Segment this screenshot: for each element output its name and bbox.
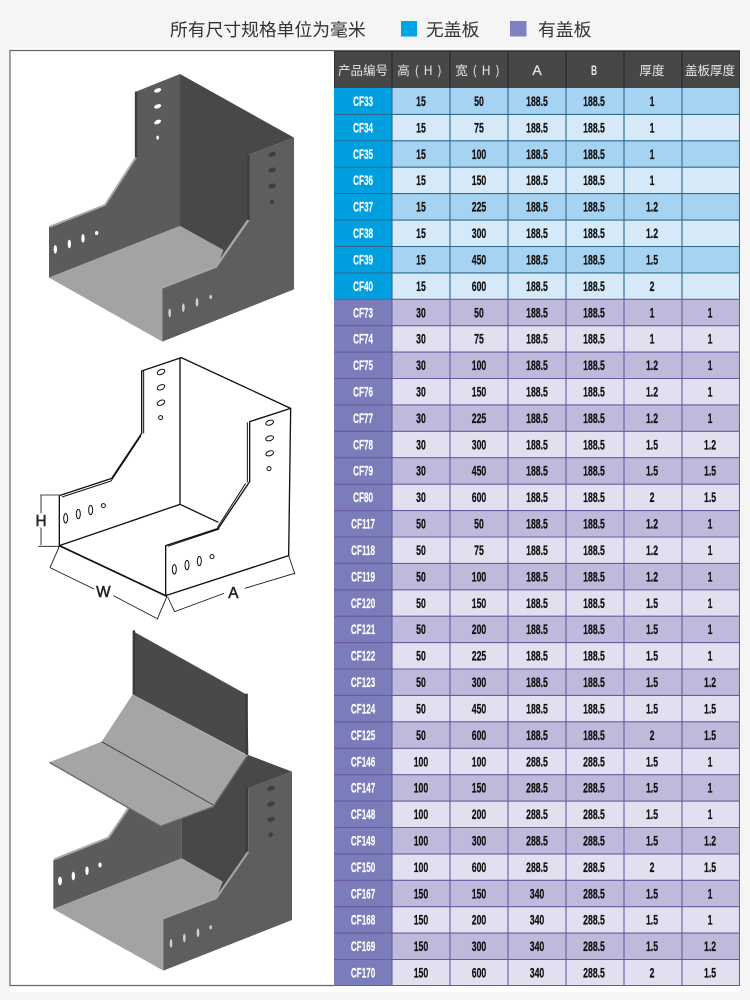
row CF38: 188.5 xyxy=(526,226,548,242)
row CF121: 188.5 xyxy=(583,622,605,638)
row CF75: CF75 xyxy=(353,359,373,374)
row CF117: CF117 xyxy=(351,518,375,532)
row CF117: 50 xyxy=(416,517,426,532)
row CF33: 1 xyxy=(650,94,655,110)
row CF124: 188.5 xyxy=(526,701,548,717)
row CF122: 50 xyxy=(416,649,426,664)
row CF125: 600 xyxy=(472,728,486,743)
row CF74: 1 xyxy=(708,332,713,347)
row CF168: CF168 xyxy=(351,914,376,928)
row CF39: 1.5 xyxy=(646,252,658,268)
row CF123: CF123 xyxy=(351,676,375,691)
row CF33 xyxy=(353,94,655,110)
row CF147: 1.5 xyxy=(646,781,658,796)
row CF73: 1 xyxy=(650,305,655,321)
row CF150: 600 xyxy=(472,860,486,876)
row CF119: 188.5 xyxy=(583,569,605,585)
row CF73: CF73 xyxy=(353,306,373,321)
row CF148: 288.5 xyxy=(583,807,605,823)
row CF40: 2 xyxy=(650,279,654,295)
row CF169: 1.5 xyxy=(646,939,658,955)
row CF74: 188.5 xyxy=(526,332,548,347)
row CF149: 288.5 xyxy=(583,833,605,849)
row CF122: CF122 xyxy=(351,650,375,664)
row CF34: 75 xyxy=(474,120,484,136)
row CF38: 300 xyxy=(472,226,486,242)
row CF34 xyxy=(353,120,655,136)
row CF78: 188.5 xyxy=(526,437,548,453)
row CF124: 50 xyxy=(416,701,426,717)
row CF40: 600 xyxy=(472,279,486,295)
row CF146: 1 xyxy=(708,754,713,770)
drawing: open cable tray reducer xyxy=(49,74,294,342)
row CF73: 50 xyxy=(474,305,484,321)
row CF37: CF37 xyxy=(353,201,373,215)
row CF121: 1 xyxy=(708,622,713,638)
row CF169: 150 xyxy=(414,939,428,955)
row CF38 xyxy=(353,226,658,242)
row CF120: 50 xyxy=(416,596,426,611)
row CF149 xyxy=(351,833,716,849)
row CF167: 150 xyxy=(472,886,486,902)
row CF80 xyxy=(353,490,716,506)
row CF146: 288.5 xyxy=(583,754,605,770)
row CF168: 340 xyxy=(530,913,544,928)
row CF37: 225 xyxy=(472,200,487,215)
row CF79 xyxy=(353,464,716,479)
row CF75: 30 xyxy=(416,358,426,374)
row CF169: 1.2 xyxy=(704,939,716,955)
row CF122 xyxy=(351,649,713,664)
row CF79: 1.5 xyxy=(704,464,716,479)
row CF123: 188.5 xyxy=(526,675,548,691)
row CF78: 188.5 xyxy=(583,437,605,453)
table header: 厚度 xyxy=(639,60,665,79)
legend: with cover xyxy=(510,16,592,42)
row CF150: 288.5 xyxy=(526,860,548,876)
table header: B xyxy=(591,64,597,79)
row CF117: 188.5 xyxy=(583,517,605,532)
row CF35: 188.5 xyxy=(526,147,548,162)
rows: no cover xyxy=(334,88,740,299)
row CF120: 188.5 xyxy=(526,596,548,611)
row CF118 xyxy=(351,543,713,559)
row CF73: 1 xyxy=(708,305,713,321)
row CF37: 188.5 xyxy=(526,200,548,215)
row CF121: 50 xyxy=(416,622,426,638)
row CF147: 100 xyxy=(414,781,428,796)
row CF123: 300 xyxy=(472,675,486,691)
row CF73: 30 xyxy=(416,305,426,321)
table header: 宽 ( H ) xyxy=(455,60,501,79)
row CF36: 15 xyxy=(416,173,426,189)
row CF125 xyxy=(351,728,716,743)
row CF120: 1.5 xyxy=(646,596,658,611)
row CF117: 1 xyxy=(708,517,713,532)
row CF121: 200 xyxy=(472,622,486,638)
row CF150: 100 xyxy=(414,860,428,876)
row CF80: 2 xyxy=(650,490,654,506)
row CF35: 100 xyxy=(472,147,486,162)
row CF118: 1.2 xyxy=(646,543,658,559)
row CF37 xyxy=(353,200,658,215)
row CF167: CF167 xyxy=(351,887,375,902)
row CF148: 100 xyxy=(414,807,428,823)
row CF33: 188.5 xyxy=(526,94,548,110)
row CF168: 1 xyxy=(708,913,713,928)
row CF38: 188.5 xyxy=(583,226,605,242)
row CF74: 1 xyxy=(650,332,655,347)
row CF35: 1 xyxy=(650,147,655,162)
row CF169: 288.5 xyxy=(583,939,605,955)
row CF33: 15 xyxy=(416,94,426,110)
row CF35: CF35 xyxy=(353,148,373,162)
row CF117: 50 xyxy=(474,517,484,532)
row CF79: CF79 xyxy=(353,465,373,479)
row CF33: 50 xyxy=(474,94,484,110)
row CF34: CF34 xyxy=(353,121,373,136)
row CF79: 188.5 xyxy=(583,464,605,479)
row CF37: 188.5 xyxy=(583,200,605,215)
row CF124: 1.5 xyxy=(646,701,658,717)
row CF169: CF169 xyxy=(351,940,375,955)
row CF77 xyxy=(353,411,713,427)
row CF78: CF78 xyxy=(353,438,373,453)
row CF38: CF38 xyxy=(353,227,373,242)
row CF170: 150 xyxy=(414,965,428,981)
row CF148 xyxy=(351,807,713,823)
row CF118: 50 xyxy=(416,543,426,559)
row CF125: 50 xyxy=(416,728,426,743)
row CF77: 30 xyxy=(416,411,426,427)
row CF80: 1.5 xyxy=(704,490,716,506)
row CF119: 1.2 xyxy=(646,569,658,585)
row CF79: 188.5 xyxy=(526,464,548,479)
row CF119: 188.5 xyxy=(526,569,548,585)
row CF124: 450 xyxy=(472,701,486,717)
row CF37: 1.2 xyxy=(646,200,658,215)
row CF79: 30 xyxy=(416,464,426,479)
row CF76: 188.5 xyxy=(526,384,548,400)
row CF170: 2 xyxy=(650,965,654,981)
row CF147: 288.5 xyxy=(583,781,605,796)
row CF117: 188.5 xyxy=(526,517,548,532)
row CF78 xyxy=(353,437,716,453)
row CF73: 188.5 xyxy=(583,305,605,321)
row CF119: CF119 xyxy=(351,570,375,585)
legend: no cover: 无盖板 xyxy=(426,16,480,42)
row CF73 xyxy=(353,305,713,321)
row CF146: 288.5 xyxy=(526,754,548,770)
row CF167: 288.5 xyxy=(583,886,605,902)
row CF150 xyxy=(351,860,716,876)
row CF39: 188.5 xyxy=(526,252,548,268)
row CF170: 340 xyxy=(530,965,544,981)
specification table xyxy=(334,51,740,986)
row CF124: 188.5 xyxy=(583,701,605,717)
row CF124 xyxy=(351,701,716,717)
row CF117 xyxy=(351,517,713,532)
row CF80: 188.5 xyxy=(583,490,605,506)
row CF120: 188.5 xyxy=(583,596,605,611)
row CF34: 15 xyxy=(416,120,426,136)
row CF146: CF146 xyxy=(351,755,375,770)
row CF123 xyxy=(351,675,716,691)
row CF74: 30 xyxy=(416,332,426,347)
row CF148: 1 xyxy=(708,807,713,823)
row CF39: CF39 xyxy=(353,253,373,268)
row CF121 xyxy=(351,622,713,638)
row CF36: 188.5 xyxy=(583,173,605,189)
row CF80: CF80 xyxy=(353,491,373,506)
row CF150: 1.5 xyxy=(704,860,716,876)
legend: with cover: 有盖板 xyxy=(538,16,592,42)
row CF40: 15 xyxy=(416,279,426,295)
row CF34: 1 xyxy=(650,120,655,136)
row CF119: 1 xyxy=(708,569,713,585)
row CF168: 200 xyxy=(472,913,486,928)
row CF36: 150 xyxy=(472,173,486,189)
row CF119: 50 xyxy=(416,569,426,585)
row CF74: 188.5 xyxy=(583,332,605,347)
row CF79: 1.5 xyxy=(646,464,658,479)
row CF40: 188.5 xyxy=(526,279,548,295)
row CF149: 100 xyxy=(414,833,428,849)
legend: no cover xyxy=(401,16,480,42)
row CF77: 188.5 xyxy=(583,411,605,427)
row CF167: 340 xyxy=(530,886,544,902)
row CF77: CF77 xyxy=(353,412,373,427)
row CF169 xyxy=(351,939,716,955)
row CF125: 1.5 xyxy=(704,728,716,743)
row CF78: 1.5 xyxy=(646,437,658,453)
row CF121: CF121 xyxy=(351,623,376,638)
row CF119: 100 xyxy=(472,569,486,585)
row CF169: 300 xyxy=(472,939,486,955)
label: W: W xyxy=(96,584,111,601)
row CF120 xyxy=(351,596,713,611)
drawing: dimension line diagram xyxy=(35,358,295,620)
row CF77: 188.5 xyxy=(526,411,548,427)
row CF146 xyxy=(351,754,713,770)
row CF74: CF74 xyxy=(353,333,373,347)
row CF118: CF118 xyxy=(351,544,375,559)
row CF39: 450 xyxy=(472,252,486,268)
row CF76: CF76 xyxy=(353,385,373,400)
row CF170: 600 xyxy=(472,965,486,981)
row CF118: 188.5 xyxy=(526,543,548,559)
table header: A xyxy=(532,62,542,78)
row CF33: CF33 xyxy=(353,95,373,110)
label: H: H xyxy=(35,513,47,530)
row CF168: 150 xyxy=(414,913,428,928)
row CF76: 150 xyxy=(472,384,486,400)
row CF170: 288.5 xyxy=(583,965,605,981)
row CF75: 188.5 xyxy=(526,358,548,374)
row CF36 xyxy=(353,173,655,189)
row CF74 xyxy=(353,332,713,347)
row CF36: 188.5 xyxy=(526,173,548,189)
drawing: cable tray reducer with cover xyxy=(49,630,292,971)
row CF39: 15 xyxy=(416,252,426,268)
row CF80: 30 xyxy=(416,490,426,506)
row CF76: 1.2 xyxy=(646,384,658,400)
row CF36: 1 xyxy=(650,173,655,189)
row CF123: 188.5 xyxy=(583,675,605,691)
row CF123: 50 xyxy=(416,675,426,691)
row CF78: 1.2 xyxy=(704,437,716,453)
row CF170: 1.5 xyxy=(704,965,716,981)
row CF168: 288.5 xyxy=(583,913,605,928)
row CF124: CF124 xyxy=(351,702,376,717)
row CF168: 1.5 xyxy=(646,913,658,928)
row CF118: 1 xyxy=(708,543,713,559)
row CF146: 100 xyxy=(414,754,428,770)
row CF118: 75 xyxy=(474,543,484,559)
row CF77: 1.2 xyxy=(646,411,658,427)
row CF150: CF150 xyxy=(351,861,375,876)
row CF125: 2 xyxy=(650,728,654,743)
row CF124: 1.5 xyxy=(704,701,716,717)
row CF75 xyxy=(353,358,713,374)
row CF125: 188.5 xyxy=(583,728,605,743)
row CF39: 188.5 xyxy=(583,252,605,268)
row CF120: 1 xyxy=(708,596,713,611)
table header: 盖板厚度 xyxy=(685,60,735,79)
row CF74: 75 xyxy=(474,332,484,347)
row CF148: CF148 xyxy=(351,808,376,823)
row CF147: 150 xyxy=(472,781,486,796)
row CF38: 15 xyxy=(416,226,426,242)
row CF147 xyxy=(351,781,713,796)
row CF80: 188.5 xyxy=(526,490,548,506)
row CF75: 1 xyxy=(708,358,713,374)
row CF77: 225 xyxy=(472,411,487,427)
row CF147: 288.5 xyxy=(526,781,548,796)
table header: 产品编号 xyxy=(338,60,388,79)
row CF147: 1 xyxy=(708,781,713,796)
row CF40 xyxy=(353,279,654,295)
row CF76: 188.5 xyxy=(583,384,605,400)
row CF119 xyxy=(351,569,713,585)
title: unit note: 所有尺寸规格单位为毫米 xyxy=(170,16,366,42)
row CF148: 1.5 xyxy=(646,807,658,823)
row CF76: 30 xyxy=(416,384,426,400)
row CF34: 188.5 xyxy=(526,120,548,136)
row CF76: 1 xyxy=(708,384,713,400)
row CF148: 200 xyxy=(472,807,486,823)
row CF123: 1.5 xyxy=(646,675,658,691)
row CF167 xyxy=(351,886,713,902)
row CF40: CF40 xyxy=(353,280,373,295)
row CF121: 1.5 xyxy=(646,622,658,638)
row CF73: 188.5 xyxy=(526,305,548,321)
row CF80: 600 xyxy=(472,490,486,506)
row CF38: 1.2 xyxy=(646,226,658,242)
row CF147: CF147 xyxy=(351,782,375,796)
row CF35: 188.5 xyxy=(583,147,605,162)
row CF122: 1 xyxy=(708,649,713,664)
row CF149: CF149 xyxy=(351,834,375,849)
row CF167: 1 xyxy=(708,886,713,902)
row CF150: 288.5 xyxy=(583,860,605,876)
row CF146: 1.5 xyxy=(646,754,658,770)
row CF79: 450 xyxy=(472,464,486,479)
row CF118: 188.5 xyxy=(583,543,605,559)
row CF150: 2 xyxy=(650,860,654,876)
row CF35 xyxy=(353,147,655,162)
row CF149: 300 xyxy=(472,833,486,849)
row CF170 xyxy=(351,965,716,981)
row CF36: CF36 xyxy=(353,174,373,189)
row CF122: 188.5 xyxy=(583,649,605,664)
row CF121: 188.5 xyxy=(526,622,548,638)
row CF167: 150 xyxy=(414,886,428,902)
row CF148: 288.5 xyxy=(526,807,548,823)
row CF122: 188.5 xyxy=(526,649,548,664)
table header xyxy=(334,51,740,88)
table header: 高 ( H ) xyxy=(397,60,443,79)
row CF120: CF120 xyxy=(351,597,375,611)
row CF122: 1.5 xyxy=(646,649,658,664)
row CF78: 300 xyxy=(472,437,486,453)
row CF117: 1.2 xyxy=(646,517,658,532)
row CF37: 15 xyxy=(416,200,426,215)
row CF40: 188.5 xyxy=(583,279,605,295)
row CF78: 30 xyxy=(416,437,426,453)
row CF146: 100 xyxy=(472,754,486,770)
row CF125: CF125 xyxy=(351,729,376,743)
row CF76 xyxy=(353,384,713,400)
row CF169: 340 xyxy=(530,939,544,955)
row CF149: 1.5 xyxy=(646,833,658,849)
row CF120: 150 xyxy=(472,596,486,611)
label: A: A xyxy=(228,585,239,602)
row CF149: 288.5 xyxy=(526,833,548,849)
row CF75: 188.5 xyxy=(583,358,605,374)
rows: with cover xyxy=(334,299,740,986)
row CF125: 188.5 xyxy=(526,728,548,743)
row CF75: 1.2 xyxy=(646,358,658,374)
row CF149: 1.2 xyxy=(704,833,716,849)
row CF167: 1.5 xyxy=(646,886,658,902)
row CF168 xyxy=(351,913,713,928)
row CF39 xyxy=(353,252,658,268)
row CF77: 1 xyxy=(708,411,713,427)
row CF35: 15 xyxy=(416,147,426,162)
row CF33: 188.5 xyxy=(583,94,605,110)
row CF122: 225 xyxy=(472,649,487,664)
row CF34: 188.5 xyxy=(583,120,605,136)
row CF75: 100 xyxy=(472,358,486,374)
row CF123: 1.2 xyxy=(704,675,716,691)
row CF170: CF170 xyxy=(351,966,375,981)
